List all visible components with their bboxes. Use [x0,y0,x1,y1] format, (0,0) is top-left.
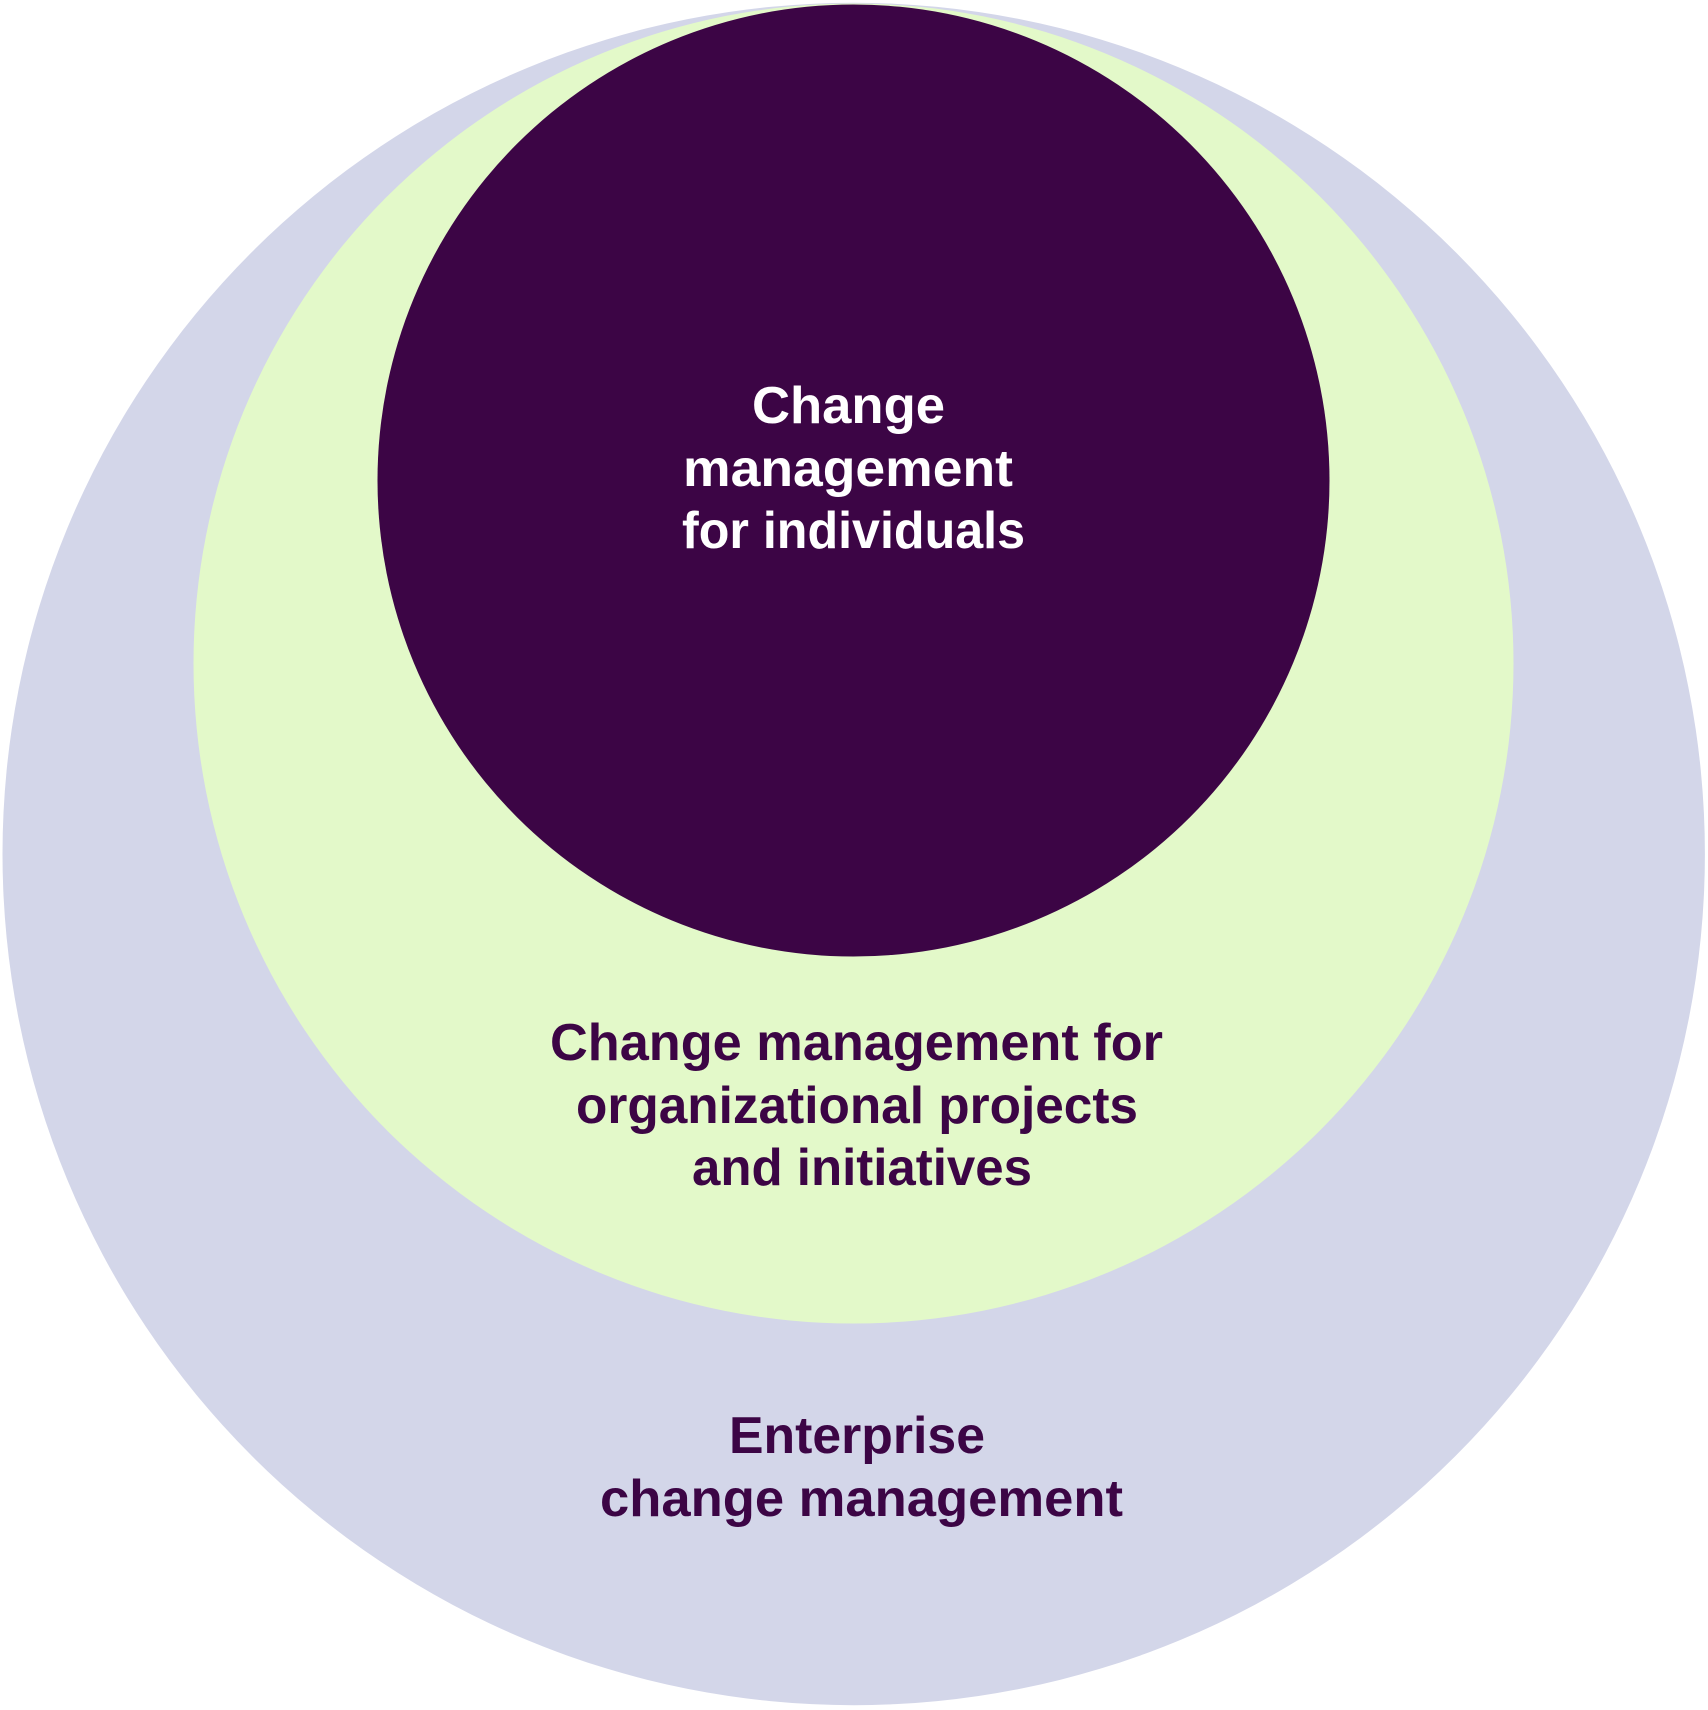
label: enterprise change management: Enterprise [729,1407,985,1465]
label: change management for individuals: Change [752,377,945,435]
label: change management for individuals: management [683,440,1013,498]
label: change management for organizational projects and initiatives [550,1014,1163,1197]
inner circle: individuals [378,4,1330,956]
label: change management for organizational projects and initiatives: Change management for [550,1014,1163,1072]
middle circle: organizational projects and initiatives [194,4,1514,1324]
label: enterprise change management: change management [600,1470,1123,1528]
label: change management for individuals [682,377,1025,560]
label: change management for organizational projects and initiatives: and initiatives [692,1139,1032,1197]
label: enterprise change management [600,1407,1123,1528]
label: change management for organizational projects and initiatives: organizational projects [576,1077,1138,1135]
label: change management for individuals: for individuals [682,502,1025,560]
